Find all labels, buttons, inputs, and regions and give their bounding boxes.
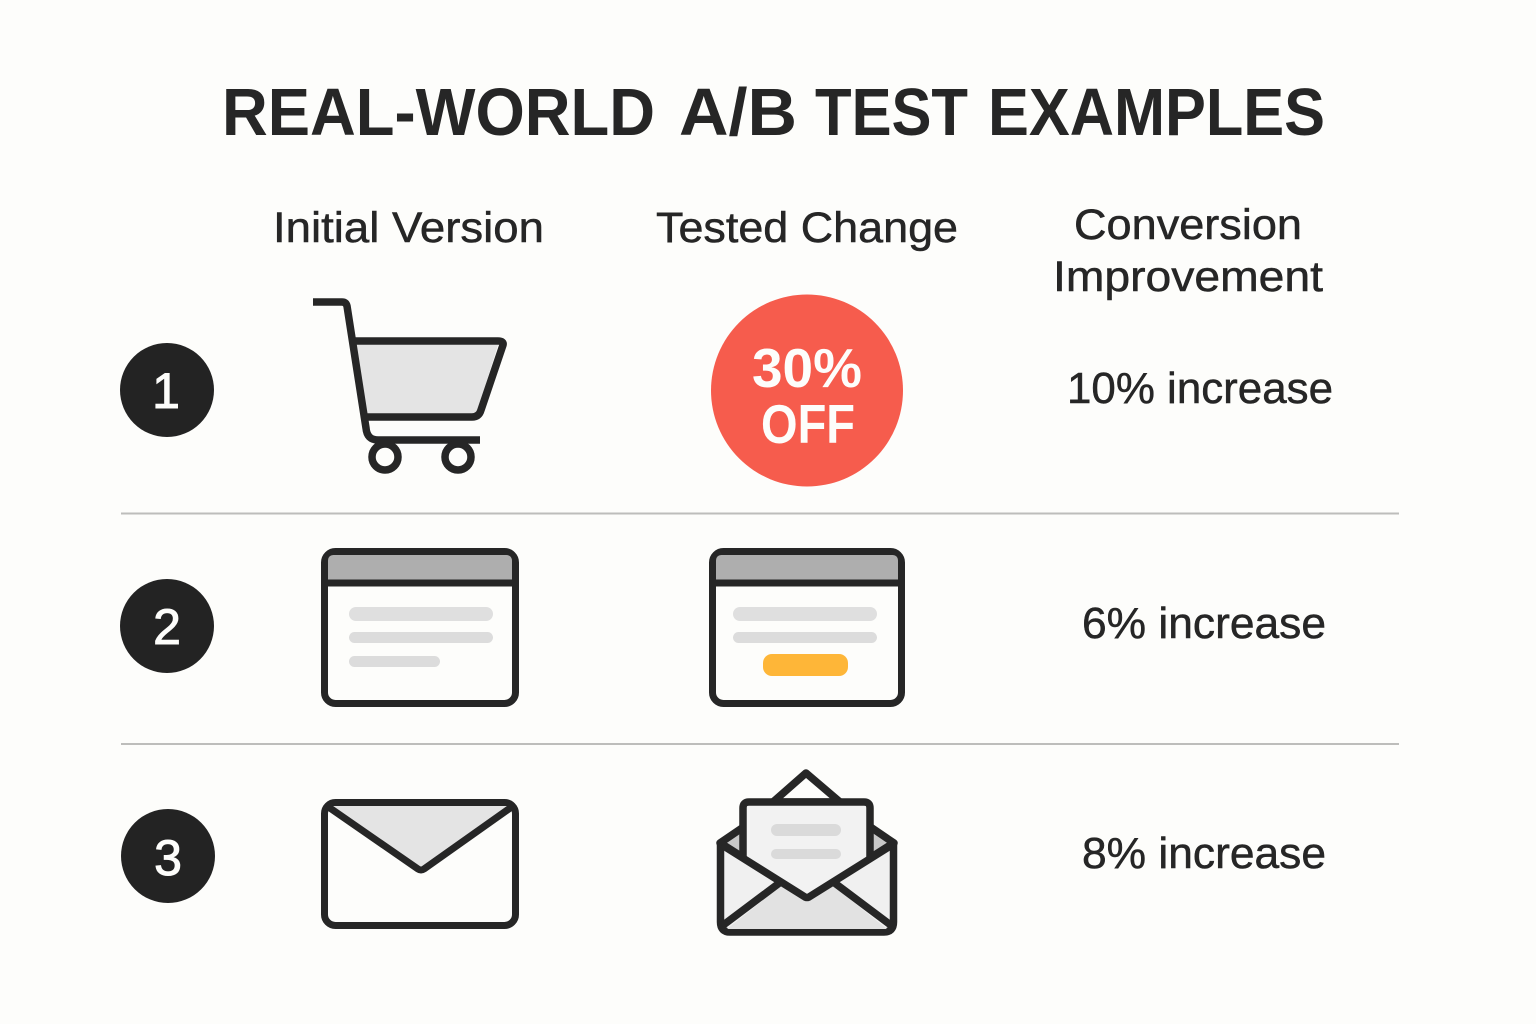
row 3 number badge — [121, 809, 215, 903]
row 3 number badge: 3 — [154, 830, 182, 886]
column heading: tested change: Tested Change — [656, 204, 958, 252]
column heading: conversion improvement: Improvement — [1053, 253, 1323, 301]
icon: closed envelope — [324, 802, 516, 926]
icon: open envelope with letter — [720, 773, 894, 932]
column heading: conversion improvement: Conversion — [1074, 201, 1302, 249]
row 1 number badge: 1 — [152, 363, 180, 419]
discount badge: 30% off: OFF — [761, 393, 855, 455]
icon: web page without button — [324, 552, 516, 704]
column heading: initial version: Initial Version — [273, 204, 544, 252]
row 1 result: 10% increase — [1067, 364, 1333, 413]
icon: web page with orange button — [712, 552, 902, 704]
title: TEST — [815, 75, 968, 150]
title — [222, 75, 1325, 150]
row 2 number badge: 2 — [153, 599, 181, 655]
discount badge: 30% off: 30% — [752, 337, 862, 399]
title: REAL-WORLD — [222, 75, 655, 150]
row 2 result: 6% increase — [1082, 599, 1326, 648]
title: A/B — [679, 75, 797, 150]
column heading: conversion improvement — [1053, 201, 1323, 301]
row 1 number badge — [120, 343, 214, 437]
discount badge: 30% off — [711, 294, 903, 486]
title: EXAMPLES — [988, 75, 1325, 150]
row 3 result: 8% increase — [1082, 829, 1326, 878]
icon: shopping cart — [313, 302, 503, 470]
row 2 number badge — [120, 579, 214, 673]
